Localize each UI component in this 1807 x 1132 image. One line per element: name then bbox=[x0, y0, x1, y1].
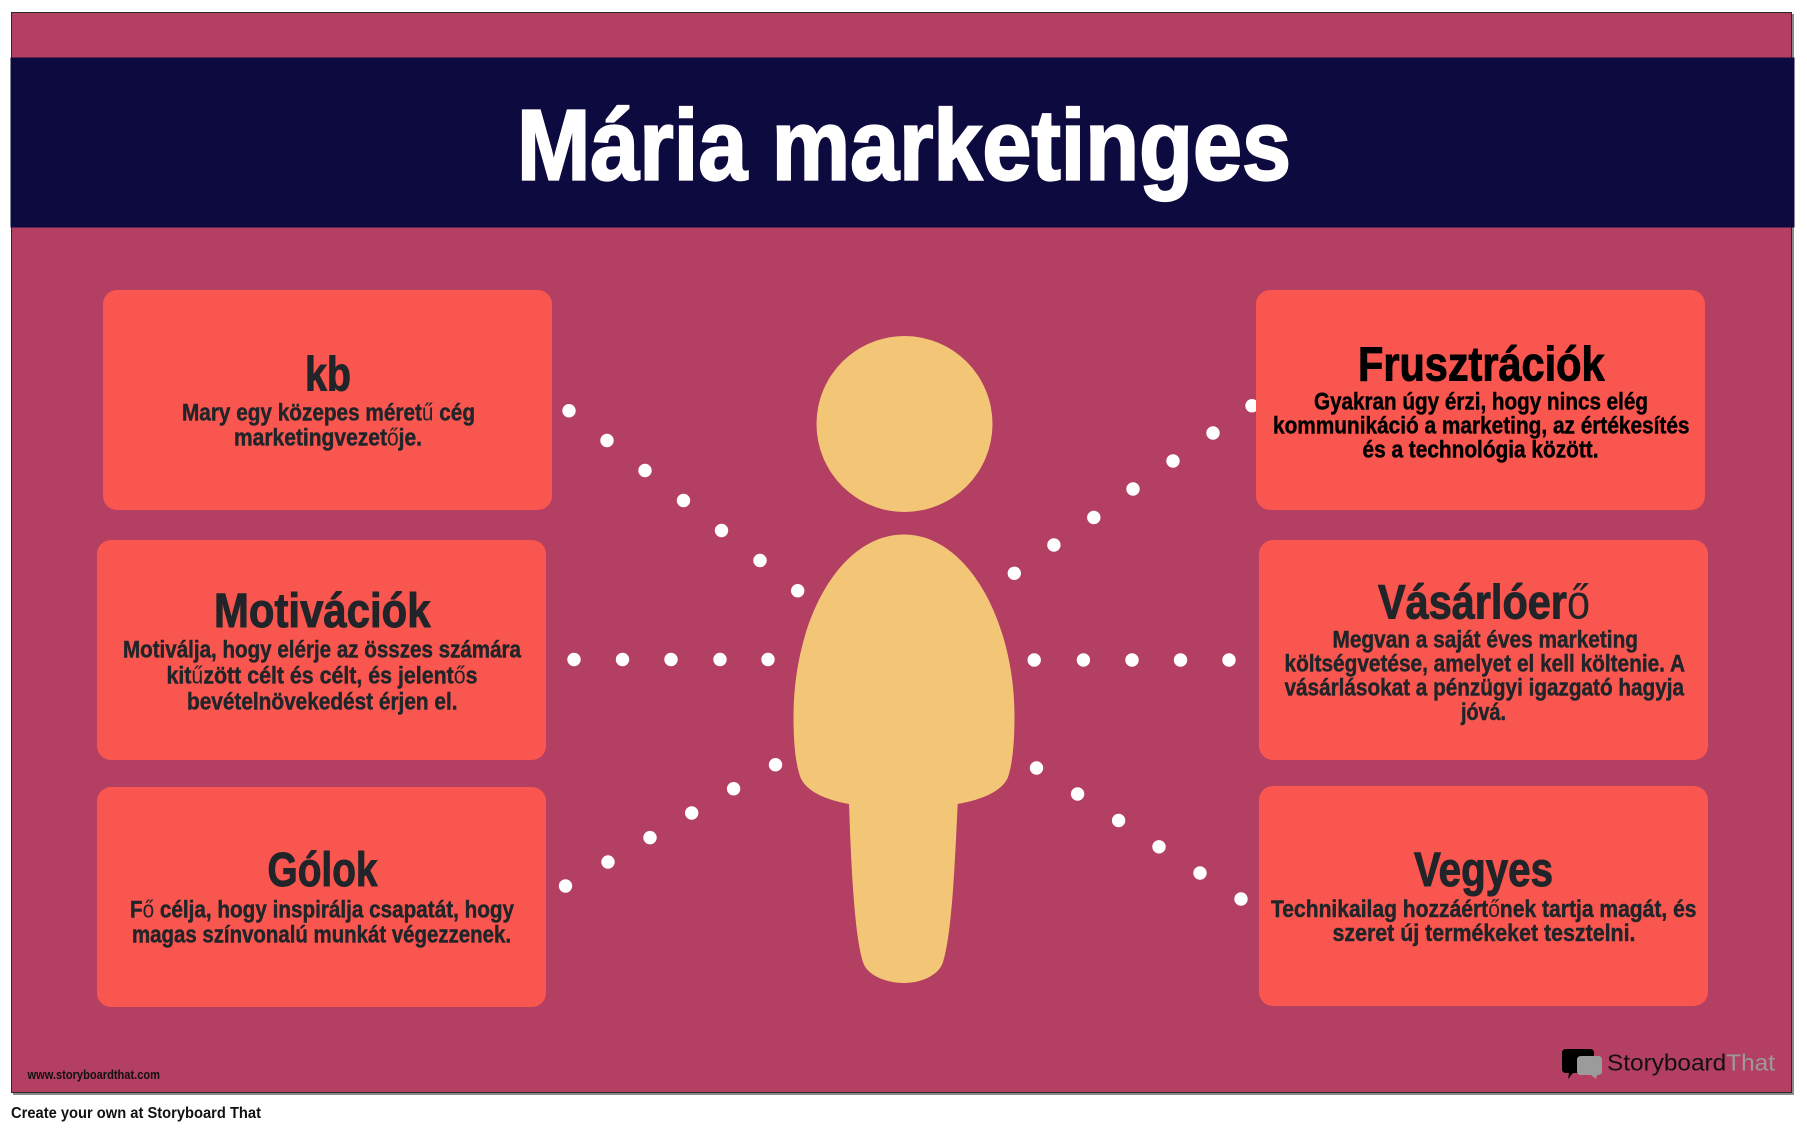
panel: kb: Mary egy közepes méretű cég bbox=[182, 400, 475, 426]
panel: vásárlóerő: vásárlásokat a pénzügyi igazgató hagyja bbox=[1284, 674, 1685, 702]
panel: motivációk: kitűzött célt és célt, és jelentős bbox=[166, 662, 478, 690]
panel: gólok bbox=[97, 787, 546, 1007]
dotted connector: top right bbox=[1008, 426, 1220, 580]
panel: kb: marketingvezetője. bbox=[234, 424, 422, 452]
panel: gólok: Gólok bbox=[268, 844, 378, 897]
icon: speech bubbles bbox=[1562, 1049, 1602, 1079]
panel: frusztrációk: Gyakran úgy érzi, hogy nincs elég bbox=[1314, 388, 1648, 416]
panel: vásárlóerő: költségvetése, amelyet el kell költenie. A bbox=[1284, 650, 1685, 678]
panel: kb bbox=[103, 290, 552, 510]
panel: frusztrációk: Frusztrációk bbox=[1358, 338, 1605, 392]
storyboard that logo bbox=[1562, 1049, 1776, 1079]
logo wordmark: Storyboard That bbox=[1607, 1050, 1776, 1076]
panel: vásárlóerő: Megvan a saját éves marketing bbox=[1332, 626, 1638, 654]
panel: frusztrációk bbox=[1256, 290, 1705, 510]
title banner: Mária marketinges bbox=[517, 90, 1291, 202]
dotted connector: bottom right bbox=[1030, 761, 1248, 906]
footer credit: Create your own at Storyboard That bbox=[11, 1105, 261, 1122]
panel: vegyes: szeret új termékeket tesztelni. bbox=[1332, 920, 1636, 947]
panel: vásárlóerő: Vásárlóerő bbox=[1378, 576, 1590, 630]
panel: frusztrációk: és a technológia között. bbox=[1362, 436, 1598, 464]
panel: gólok: Fő célja, hogy inspirálja csapatát, hogy bbox=[130, 896, 515, 924]
panel: vegyes bbox=[1259, 786, 1708, 1006]
panel: motivációk: Motiválja, hogy elérje az összes számára bbox=[123, 636, 522, 664]
website url: www.storyboardthat.com bbox=[27, 1067, 160, 1082]
panel: kb: kb bbox=[305, 348, 351, 402]
title banner bbox=[10, 58, 1794, 228]
dot partly behind frustrations panel bbox=[1245, 395, 1264, 417]
panel: motivációk: bevételnövekedést érjen el. bbox=[187, 688, 458, 716]
panel: vegyes: Vegyes bbox=[1414, 844, 1553, 897]
panel: frusztrációk: kommunikáció a marketing, az értékesítés bbox=[1273, 412, 1690, 440]
panel: motivációk bbox=[97, 540, 546, 760]
dotted connector: middle left bbox=[567, 653, 775, 666]
dotted connector: top left bbox=[562, 404, 804, 597]
dotted connector: bottom left bbox=[559, 758, 782, 893]
panel: gólok: magas színvonalú munkát végezzenek. bbox=[132, 922, 511, 948]
central person figure bbox=[794, 336, 1014, 983]
panel: vásárlóerő: jóvá. bbox=[1460, 699, 1506, 726]
panel: vásárlóerő bbox=[1259, 540, 1708, 760]
panel: vegyes: Technikailag hozzáértőnek tartja magát, és bbox=[1271, 896, 1696, 923]
dotted connector: middle right bbox=[1028, 653, 1236, 667]
panel: motivációk: Motivációk bbox=[214, 585, 431, 638]
